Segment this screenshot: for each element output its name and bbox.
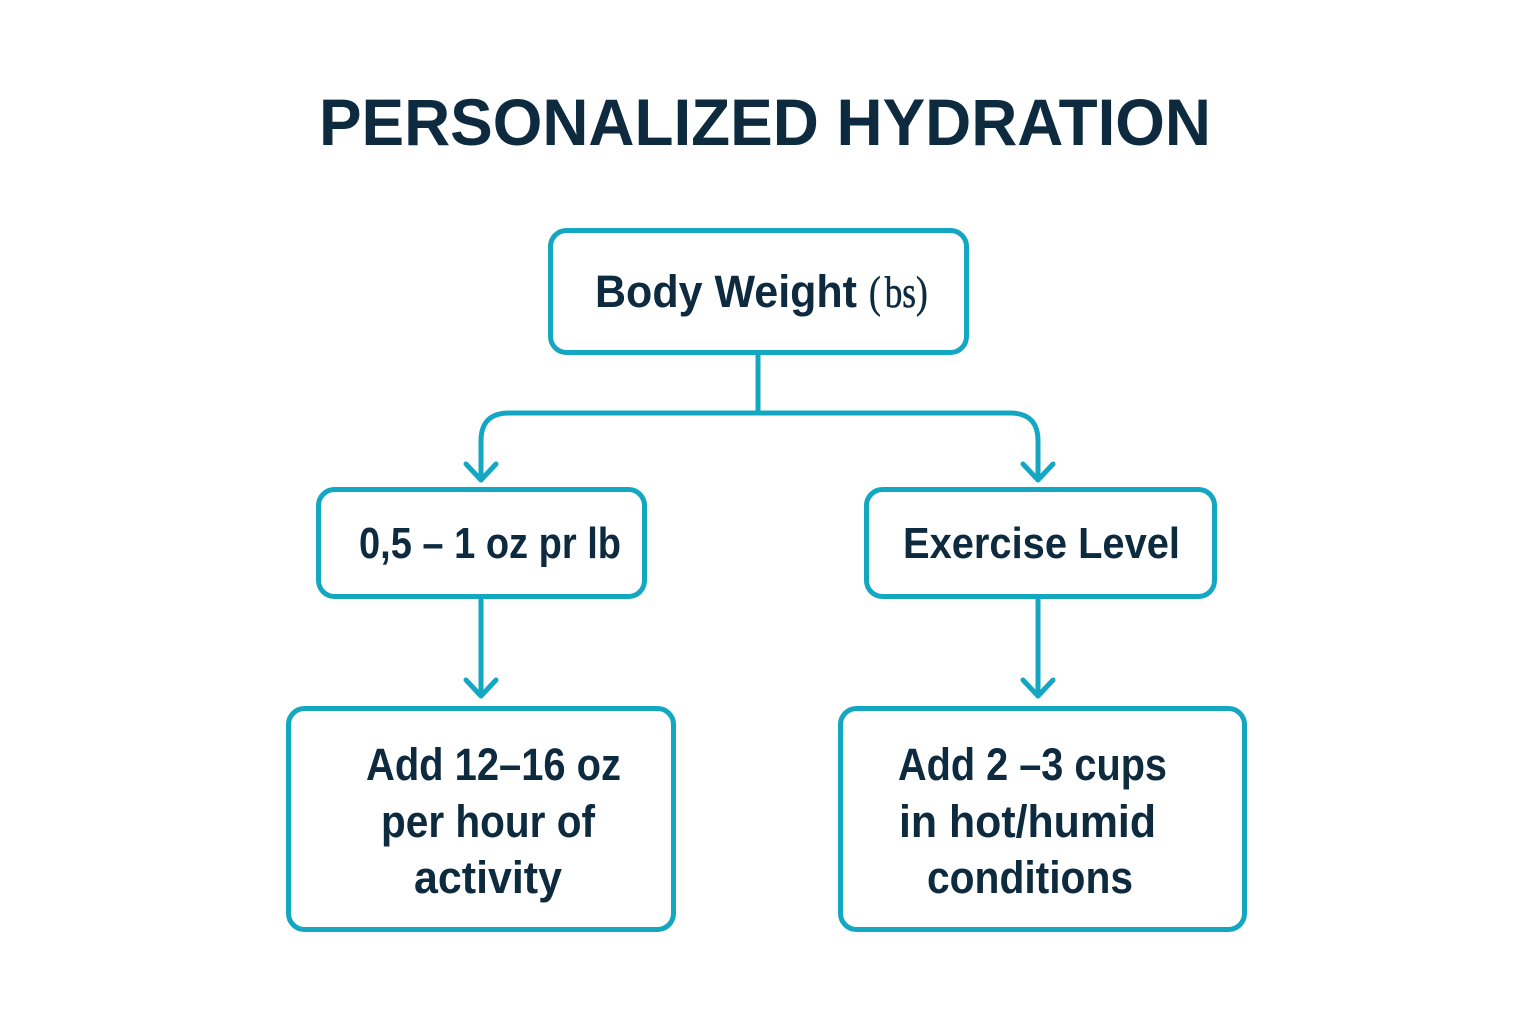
box: add ounces per hour of activity (288, 708, 674, 930)
box: add cups in hot or humid conditions: in hot/humid (899, 796, 1156, 847)
arrow: exercise box to climate box (1023, 597, 1053, 696)
box: exercise level: Exercise Level (903, 519, 1180, 568)
box: exercise level (866, 490, 1214, 596)
box: add cups in hot or humid conditions: Add 2 –3 cups (898, 739, 1167, 790)
box: add ounces per hour of activity: Add 12–16 oz (366, 739, 621, 790)
arrow: ounces box to activity box (466, 597, 496, 696)
box: ounces per pound (318, 490, 644, 596)
box: body weight (550, 230, 966, 352)
arrow: body weight branching to both columns (466, 353, 1053, 480)
box: body weight: Body Weight (595, 266, 857, 317)
box: add ounces per hour of activity: activity (414, 852, 562, 903)
title: PERSONALIZED HYDRATION (319, 85, 1211, 159)
box: add cups in hot or humid conditions (840, 708, 1244, 930)
box: ounces per pound: 0,5 – 1 oz pr lb (359, 519, 621, 568)
box: add ounces per hour of activity: per hour of (381, 796, 596, 847)
box: add cups in hot or humid conditions: conditions (927, 852, 1133, 903)
box: body weight: (bs) (869, 267, 928, 317)
